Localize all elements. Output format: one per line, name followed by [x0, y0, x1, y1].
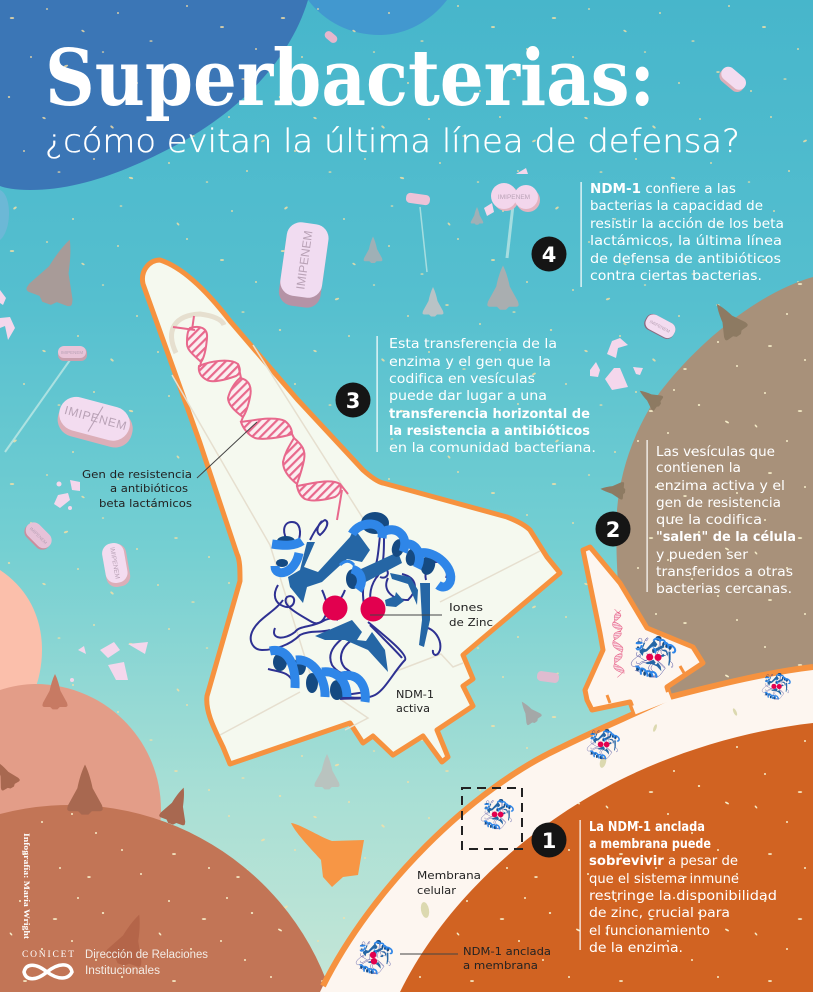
small brown shuttle at left edge	[600, 480, 626, 500]
terracotta cell	[0, 805, 330, 992]
step 4 text: de defensa de antibióticos	[590, 252, 781, 267]
label: active NDM-1: NDM-1	[396, 688, 434, 701]
leader lines	[197, 422, 458, 954]
step 1 text: restringe la disponibilidad	[589, 889, 777, 904]
pill: tiny near shuttle	[536, 671, 560, 683]
pill: tiny at left: IMIPENEM	[61, 350, 83, 355]
label: cell membrane: Membrana	[417, 869, 481, 882]
label: membrane anchored NDM-1: a membrana	[463, 959, 538, 972]
step 4	[532, 182, 784, 287]
label: cell membrane	[417, 869, 481, 897]
step 2 text: Las vesículas que	[656, 445, 775, 460]
label: membrane anchored NDM-1: NDM-1 anclada	[463, 945, 551, 958]
step 3 text: transferencia horizontal de	[389, 407, 590, 422]
pill: top vertical imipenem: IMIPENEM	[293, 230, 315, 290]
step 4 text: resistir la acción de los beta	[590, 217, 784, 232]
pill: tiny top center	[405, 192, 431, 206]
institution name: Institucionales	[85, 965, 160, 977]
label: resistance gene	[82, 468, 192, 510]
step 4: 4	[542, 243, 556, 267]
step 2 text: contienen la	[656, 461, 741, 476]
label: resistance gene: a antibióticos	[110, 482, 188, 495]
pill: small top left	[323, 29, 339, 45]
label: membrane anchored NDM-1	[463, 945, 551, 972]
pill: lower left diagonal	[21, 519, 55, 553]
step 1 text: que el sistema inmune	[589, 872, 739, 887]
small shuttle budding from membrane	[582, 547, 703, 710]
label: cell membrane: celular	[417, 884, 456, 897]
step 2 text: que la codifica	[656, 513, 762, 528]
title: Superbacterias:	[45, 33, 655, 124]
small brown shuttle	[635, 384, 665, 412]
step 1 text: La NDM-1 anclada	[589, 820, 705, 835]
step 3 text: codifica en vesículas	[389, 372, 535, 387]
step 1	[532, 820, 777, 956]
pill: small right	[642, 311, 678, 341]
grey shuttles	[24, 207, 543, 789]
label: zinc ions: de Zinc	[449, 616, 493, 629]
subtitle: ¿cómo evitan la última línea de defensa?	[45, 122, 740, 160]
step 3: 3	[346, 389, 360, 413]
brown cell	[616, 277, 813, 720]
shuttle on terracotta cell	[103, 908, 157, 971]
label: resistance gene: Gen de resistencia	[82, 468, 192, 481]
brown cell speck texture	[616, 277, 813, 720]
background blue cells	[0, 0, 447, 240]
step 4 text: lactámicos, la última línea	[590, 234, 782, 249]
step 1 text	[589, 820, 777, 956]
step 2 text: gen de resistencia	[656, 496, 781, 511]
step 1 text: el funcionamiento	[589, 924, 710, 939]
step 4 text	[590, 182, 784, 284]
membrane flecks	[420, 690, 738, 919]
step 3 text: en la comunidad bacteriana.	[389, 441, 596, 456]
step 2 text: bacterias cercanas.	[656, 582, 792, 597]
shuttle docking on red cell	[67, 764, 103, 815]
institution name: Dirección de Relaciones	[85, 949, 208, 961]
membrane proteins	[356, 673, 790, 974]
cytoplasm	[400, 723, 813, 992]
small shuttle protein	[631, 636, 675, 678]
pill fragments	[0, 168, 643, 682]
shuttle panel lines	[172, 345, 540, 735]
salmon cell	[0, 684, 161, 920]
step 2 text: transferidos a otras	[656, 565, 793, 580]
step 1 text: a membrana puede	[589, 837, 711, 852]
label: active NDM-1	[396, 688, 434, 715]
brown shuttle on top of cell	[706, 296, 750, 343]
pill: lower left diagonal: IMIPENEM	[29, 526, 48, 545]
step 2: 2	[606, 518, 620, 542]
step 2 text: "salen" de la célula	[656, 530, 796, 545]
membrane	[320, 667, 813, 992]
pill: lower left vertical	[101, 541, 132, 589]
shuttle on salmon cell	[42, 674, 68, 709]
step 3	[336, 336, 596, 456]
label: resistance gene: beta lactámicos	[99, 497, 192, 510]
small DNA	[582, 607, 654, 679]
pill: large imipenem: IMIPENEM	[63, 403, 129, 433]
pill: top vertical imipenem	[277, 220, 330, 309]
step 2 text: y pueden ser	[656, 548, 749, 563]
step 4 text: bacterias la capacidad de	[590, 199, 763, 214]
zinc ions	[322, 596, 386, 622]
large shuttle	[142, 260, 560, 764]
step 4 text: contra ciertas bacterias.	[590, 269, 762, 284]
CONICET logo	[22, 950, 74, 979]
credit: Infografía: María Wright	[22, 833, 32, 939]
pill: broken double pill	[491, 183, 540, 212]
step 1 text: de zinc, crucial para	[589, 906, 730, 921]
label: zinc ions	[449, 601, 493, 629]
shuttle leaving red cell	[158, 783, 196, 828]
dashed highlight box	[462, 788, 522, 849]
pill: small top right	[716, 64, 749, 95]
DNA helix	[173, 316, 348, 520]
NDM-1 protein ribbon	[251, 512, 451, 702]
step 1 text: sobrevivir a pesar de	[589, 854, 738, 869]
pill: tiny at left	[58, 346, 87, 361]
icon: infinity	[24, 965, 72, 979]
institution name	[85, 949, 208, 977]
label: zinc ions: Iones	[449, 601, 483, 614]
step 3 text: la resistencia a antibióticos	[389, 424, 590, 439]
step 1: 1	[542, 829, 556, 853]
step 2 text	[656, 445, 796, 597]
orange shuttle	[291, 823, 364, 887]
pill: small right: IMIPENEM	[649, 319, 671, 334]
step 2	[596, 440, 796, 597]
step 3 text: puede dar lugar a una	[389, 389, 547, 404]
shuttle on left cell edge	[0, 757, 21, 793]
step 3 text: Esta transferencia de la	[389, 337, 557, 352]
terracotta speck texture	[0, 805, 330, 992]
pink cell	[0, 570, 42, 735]
step 3 text: enzima y el gen que la	[389, 355, 551, 370]
pill: broken double pill: IMIPENEM	[498, 194, 530, 201]
trails	[5, 205, 513, 452]
pills	[0, 29, 749, 683]
step 1 text: de la enzima.	[589, 941, 683, 956]
shuttle nose arc	[172, 314, 224, 353]
pill: large imipenem	[54, 393, 138, 451]
pill: lower left vertical: IMIPENEM	[108, 547, 121, 580]
cytoplasm speck texture	[400, 723, 813, 992]
CONICET logo: CONICET	[22, 950, 74, 960]
step 4 text: NDM-1 confiere a las	[590, 182, 736, 197]
step 3 text	[389, 337, 596, 456]
label: active NDM-1: activa	[396, 702, 430, 715]
step 2 text: enzima activa y el	[656, 479, 785, 494]
